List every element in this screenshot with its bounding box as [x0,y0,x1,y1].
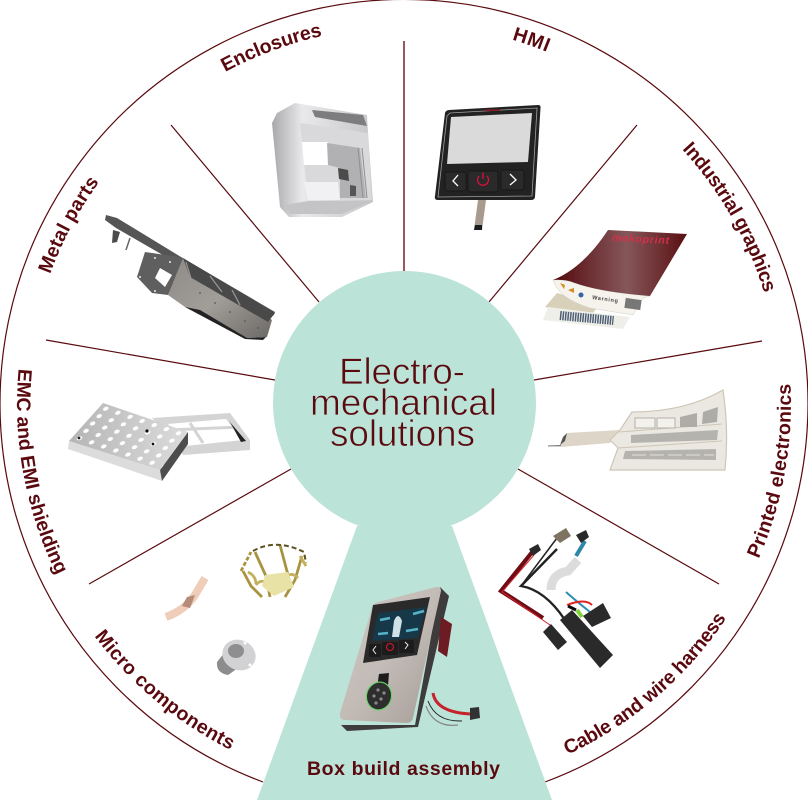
label: Box build assembly: Box build assembly [307,758,500,780]
label: EMC and EMI shielding: EMC and EMI shielding [16,370,66,574]
central title: mechanical [310,382,497,423]
icon: enclosure [272,103,373,217]
label: Printed electronics: Printed electronics [746,384,792,558]
label: Micro components: Micro components [95,628,234,748]
icon: HMI membrane keypad [435,105,541,230]
label: Industrial graphics: Industrial graphics [682,141,773,292]
icon: industrial graphics labels: Warning [592,295,618,305]
sector dividers [46,41,762,584]
icon: industrial graphics labels: mekoprint [612,232,670,247]
label: HMI: HMI [513,27,551,52]
central keyhole shape [257,271,552,800]
icon: cable and wire harness [501,528,613,668]
central title: solutions [330,413,475,454]
label: Metal parts: Metal parts [38,178,98,273]
label: Enclosures: Enclosures [220,26,321,72]
icon: metal parts chassis [105,215,275,340]
central title: Electro- [339,351,465,392]
icon: box build charging unit [340,587,480,731]
central title [310,351,497,454]
icon: micro components [166,545,306,676]
icon: printed electronics sheet [548,390,727,470]
icon: EMC and EMI shielding can [68,403,250,481]
icon: industrial graphics labels [543,230,687,329]
label: Cable and wire harness: Cable and wire harness [564,614,725,752]
